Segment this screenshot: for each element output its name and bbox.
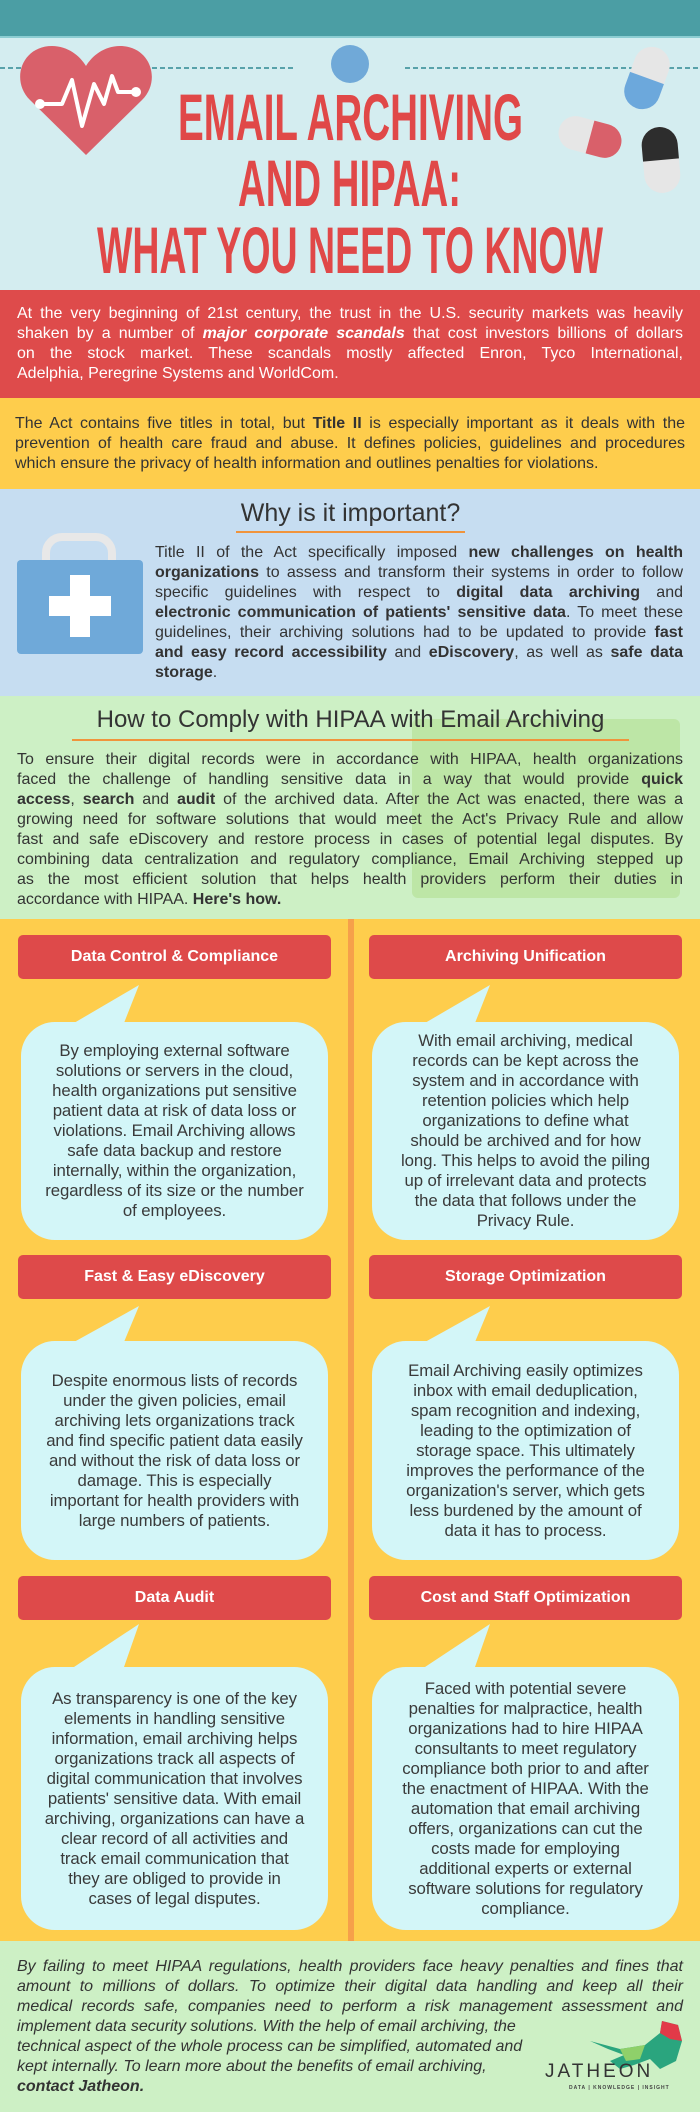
panel: act yellow: The Act contains five titles in total, but Title II is especially important as it deals with the — [15, 415, 685, 432]
card: data control: internally, within the organization, — [53, 1161, 296, 1180]
card: data audit: they are obliged to provide in — [68, 1868, 281, 1888]
card: storage: spam recognition and indexing, — [411, 1400, 640, 1420]
text: comply paragraph: fast and safe eDiscovery and restore process in cases of potential legal disputes. By — [17, 831, 683, 848]
card: storage — [369, 1255, 682, 1560]
top teal bar — [0, 0, 700, 38]
text: comply paragraph: growing need for software solutions that would meet the Act's Privacy Rule and allow — [17, 811, 683, 828]
card: data audit: cases of legal disputes. — [88, 1888, 261, 1908]
text: conclusion: medical records safe, companies need to perform a risk management assessment and — [17, 1998, 683, 2015]
card: ediscovery: damage. This is especially — [78, 1470, 271, 1490]
card: data control: regardless of its size or the number — [45, 1181, 304, 1200]
card: data audit: track email communication that — [60, 1848, 289, 1868]
card: ediscovery: and without the risk of data loss or — [49, 1450, 300, 1470]
card: archiving unification: records can be kept across the — [412, 1051, 639, 1070]
card: archiving unification: With email archiving, medical — [418, 1031, 633, 1050]
card: archiving unification: Privacy Rule. — [477, 1211, 574, 1230]
card: ediscovery: under the given policies, email — [63, 1390, 286, 1410]
title — [97, 80, 603, 287]
text: why paragraph: and easy record accessibility and eDiscovery, as well as safe data — [155, 644, 683, 661]
panel: intro red: Adelphia, Peregrine Systems and WorldCom. — [17, 365, 339, 382]
card: data control: Data Control & Compliance — [71, 948, 278, 965]
panel: act yellow: prevention of health care fraud and abuse. It defines policies, guidelines and procedures — [15, 435, 685, 452]
card: data control: patient data at risk of data loss or — [53, 1101, 296, 1120]
card: data audit: archiving, organizations can have a — [45, 1808, 304, 1828]
card: data audit: organizations track all aspects of — [54, 1748, 295, 1768]
panel: act yellow: which ensure the privacy of health information and outlines penalties for violations. — [15, 455, 598, 472]
card: data control: health organizations put sensitive — [52, 1081, 297, 1100]
card: data audit: information, email archiving helps — [52, 1728, 297, 1748]
text: why paragraph: organizations to assess and transform their systems in order to follow — [155, 564, 683, 581]
card: storage: Storage Optimization — [445, 1268, 606, 1285]
text: why paragraph: specific guidelines with respect to digital data archiving and — [155, 584, 683, 601]
card: cost: Cost and Staff Optimization — [421, 1589, 630, 1606]
card: cost: offers, organizations can cut the — [408, 1818, 643, 1838]
card: cost: organizations had to hire HIPAA — [408, 1718, 643, 1738]
card: ediscovery: Despite enormous lists of records — [52, 1370, 297, 1390]
text: why paragraph: guidelines, their archiving solutions had to be updated to provide fast — [155, 624, 683, 641]
card: data control: violations. Email Archiving allows — [54, 1121, 295, 1140]
text: conclusion: implement data security solutions. With the help of email archiving, the — [17, 2018, 516, 2035]
panel: intro red — [0, 290, 700, 398]
card: data audit: patients' sensitive data. With email — [48, 1788, 301, 1808]
card: ediscovery: and find specific patient data easily — [46, 1430, 303, 1450]
card: data control: safe data backup and restore — [67, 1141, 282, 1160]
card: data audit — [18, 1576, 331, 1930]
card: archiving unification: up of irrelevant data and protects — [405, 1171, 646, 1190]
logo: jatheon: DATA | KNOWLEDGE | INSIGHT — [569, 2085, 670, 2091]
panel: how to comply — [0, 696, 700, 919]
card: cost: costs made for employing — [431, 1838, 620, 1858]
card: cost: software solutions for regulatory — [408, 1878, 643, 1898]
text: why paragraph: Title II of the Act specifically imposed new challenges on health — [155, 544, 683, 561]
card: data control: of employees. — [123, 1201, 226, 1220]
card: ediscovery: Fast & Easy eDiscovery — [84, 1268, 265, 1285]
text: conclusion: By failing to meet HIPAA regulations, health providers face heavy penalties and fines that — [17, 1958, 683, 1975]
speech tails — [74, 985, 490, 1667]
watermark icon — [412, 719, 680, 898]
card: ediscovery: important for health providers with — [50, 1490, 299, 1510]
card: cost: consultants to meet regulatory — [415, 1738, 636, 1758]
card: archiving unification: system and in accordance with — [412, 1071, 639, 1090]
heading: why: Why is it important? — [241, 499, 460, 527]
card: cost: automation that email archiving — [411, 1798, 640, 1818]
card: archiving unification — [369, 935, 682, 1240]
card: data audit: digital communication that involves — [47, 1768, 302, 1788]
text: conclusion: kept internally. To learn more about the benefits of email archiving, — [17, 2058, 487, 2075]
text: conclusion: technical aspect of the whole process can be simplified, automated and — [17, 2038, 522, 2055]
card: cost: compliance both prior to and after — [402, 1758, 649, 1778]
card: archiving unification: Archiving Unification — [445, 948, 606, 965]
card: archiving unification: the data that follows under the — [415, 1191, 636, 1210]
header decorations — [0, 45, 698, 193]
card: ediscovery: large numbers of patients. — [79, 1510, 270, 1530]
text: why paragraph: electronic communication of patients' sensitive data. To meet these — [155, 604, 683, 621]
panel: act yellow — [0, 398, 700, 489]
card: ediscovery: archiving lets organizations track — [54, 1410, 295, 1430]
card: cost: additional experts or external — [419, 1858, 632, 1878]
panel: benefits grid — [0, 919, 700, 1941]
card: storage: organization's server, which gets — [406, 1480, 645, 1500]
card: ediscovery — [18, 1255, 331, 1560]
text: comply paragraph — [17, 751, 684, 908]
logo: jatheon — [545, 2021, 682, 2091]
icon: heart with pulse — [20, 46, 152, 155]
text: why paragraph — [155, 544, 684, 681]
heading: how to comply: How to Comply with HIPAA with Email Archiving — [97, 706, 604, 733]
card: data control — [18, 935, 331, 1240]
card: data control: By employing external software — [59, 1041, 290, 1060]
card: cost: penalties for malpractice, health — [409, 1698, 642, 1718]
card: data audit: elements in handling sensitive — [64, 1708, 285, 1728]
text: comply paragraph: combining data centralization and regulatory compliance, Email Archiving stepped up — [17, 851, 683, 868]
card: storage: Email Archiving easily optimizes — [408, 1360, 643, 1380]
text: comply paragraph: accordance with HIPAA. Here's how. — [17, 891, 281, 908]
text: comply paragraph: To ensure their digital records were in accordance with HIPAA, health organizations — [17, 751, 683, 768]
card: storage: inbox with email deduplication, — [413, 1380, 638, 1400]
card: storage: leading to the optimization of — [420, 1420, 631, 1440]
panel: footer — [0, 1941, 700, 2112]
card: data control: solutions or servers in the cloud, — [56, 1061, 293, 1080]
text: conclusion — [17, 1958, 684, 2095]
icon: pills — [555, 42, 682, 194]
icon: medical kit — [17, 533, 143, 654]
text: comply paragraph: faced the challenge of handling sensitive data in a way that would provide quick — [17, 771, 683, 788]
card: archiving unification: organizations to define what — [422, 1111, 629, 1130]
card: storage: less burdened by the amount of — [409, 1500, 642, 1520]
text: conclusion: amount to millions of dollars. To optimize their digital data handling and keep all their — [17, 1978, 683, 1995]
panel: intro red: shaken by a number of major corporate scandals that cost investors billions of dollars — [17, 325, 683, 342]
card: cost: the enactment of HIPAA. With the — [402, 1778, 649, 1798]
card: cost — [369, 1576, 682, 1930]
panel: intro red: At the very beginning of 21st century, the trust in the U.S. security markets was heavily — [17, 305, 683, 322]
text: conclusion: contact Jatheon. — [17, 2078, 144, 2095]
text: comply paragraph: as the most efficient solution that helps health providers perform their duties in — [17, 871, 683, 888]
title: AND HIPAA: — [238, 146, 461, 220]
card: data audit: Data Audit — [135, 1589, 214, 1606]
panel: why important — [0, 489, 700, 696]
card: data audit: clear record of all activities and — [61, 1828, 288, 1848]
logo: jatheon: JATHEON — [545, 2061, 653, 2082]
header background — [0, 0, 700, 290]
card: data audit: As transparency is one of the key — [52, 1688, 297, 1708]
divider line — [348, 919, 354, 1941]
panel: intro red: on the stock market. These scandals mostly affected Enron, Tyco International, — [17, 345, 683, 362]
card: storage: improves the performance of the — [406, 1460, 645, 1480]
card: cost: compliance. — [481, 1898, 570, 1918]
card: storage: data it has to process. — [445, 1520, 606, 1540]
card: archiving unification: long. This helps to avoid the piling — [401, 1151, 650, 1170]
card: storage: storage space. This ultimately — [416, 1440, 635, 1460]
icon: blue dot — [331, 45, 369, 83]
text: comply paragraph: access, search and audit of the archived data. After the Act was enacted, there was a — [17, 791, 683, 808]
card: cost: Faced with potential severe — [425, 1678, 626, 1698]
card: archiving unification: retention policies which help — [422, 1091, 629, 1110]
text: why paragraph: storage. — [155, 664, 217, 681]
card: archiving unification: should be archived and for how — [410, 1131, 641, 1150]
